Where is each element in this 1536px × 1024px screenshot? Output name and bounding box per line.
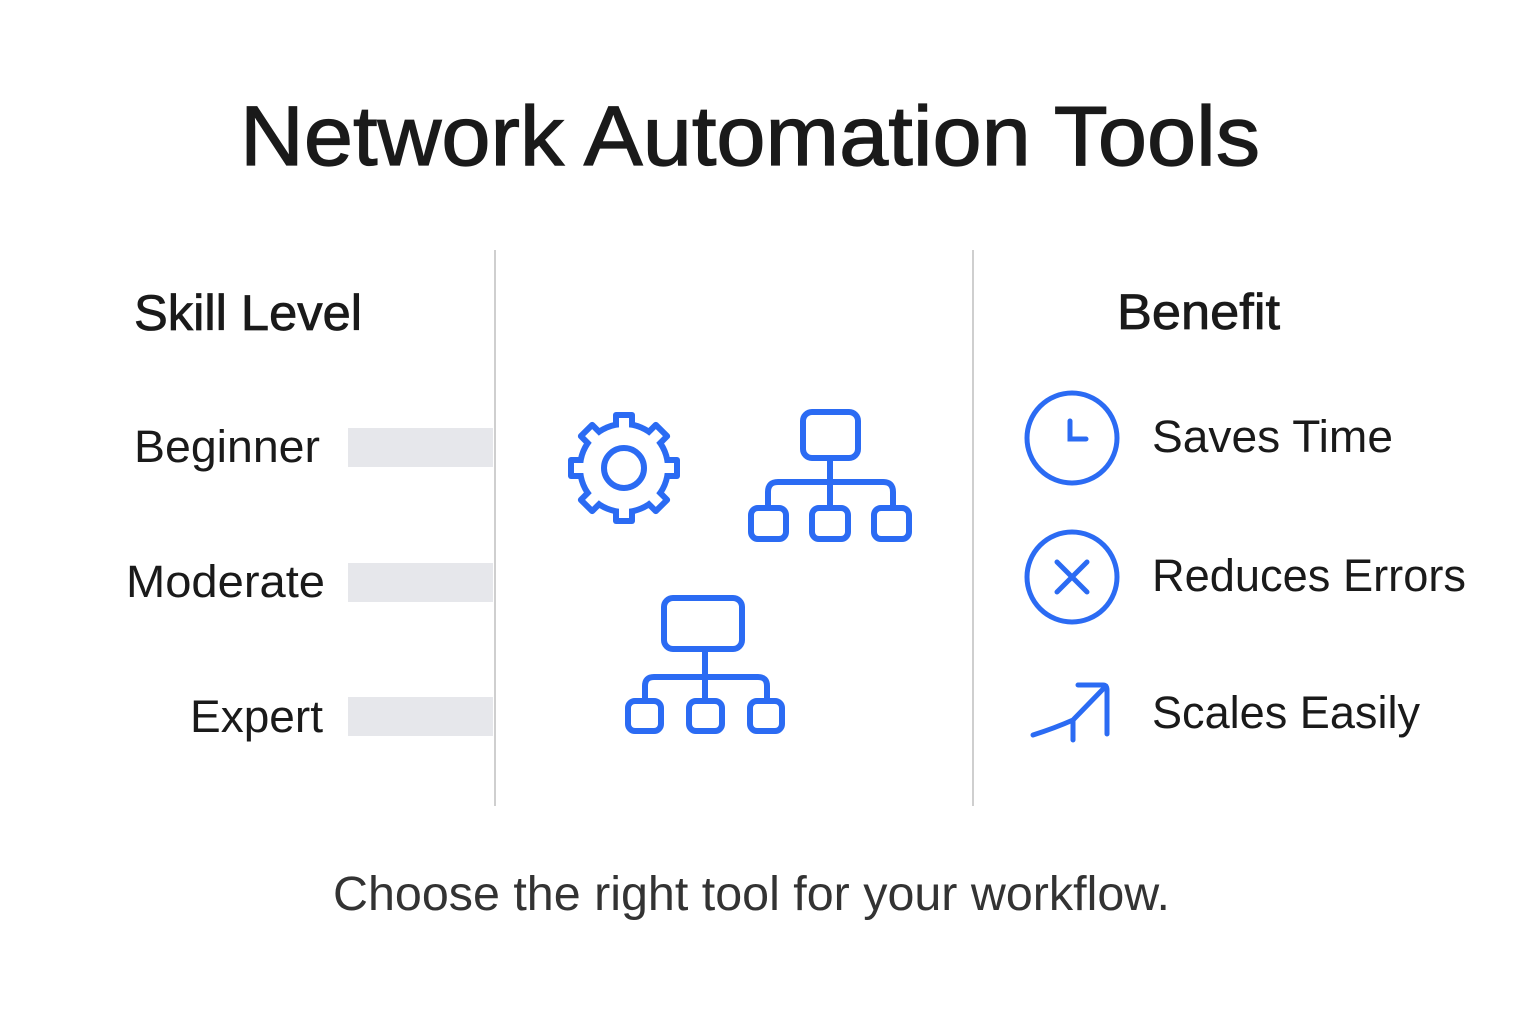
row: beginner: [134, 421, 493, 472]
panel: skill level: [126, 285, 493, 742]
benefit: saves time: [1027, 393, 1393, 483]
row: beginner: Beginner: [134, 421, 320, 472]
benefit: reduces errors: Reduces Errors: [1152, 550, 1466, 601]
heading: skill level: Skill Level: [134, 285, 362, 341]
panel: tools icons: [568, 412, 909, 731]
icon: hierarchy 1: [751, 412, 909, 539]
icon: x circle: [1027, 532, 1117, 622]
row: moderate: [126, 556, 493, 607]
icon: gear: [568, 412, 680, 524]
heading: benefit: Benefit: [1117, 284, 1280, 340]
row: expert: Expert: [190, 691, 324, 742]
icon: hierarchy 2: [628, 598, 782, 731]
row: expert: [190, 691, 493, 742]
panel: benefit: [1027, 284, 1466, 740]
icon: growth arrow: [1033, 685, 1107, 740]
icon: clock: [1027, 393, 1117, 483]
benefit: scales easily: Scales Easily: [1152, 687, 1420, 738]
benefit: reduces errors: [1027, 532, 1466, 622]
footer caption: Choose the right tool for your workflow.: [333, 868, 1170, 921]
benefit: scales easily: [1033, 685, 1420, 740]
row: moderate: Moderate: [126, 556, 325, 607]
benefit: saves time: Saves Time: [1152, 411, 1393, 462]
title: Network Automation Tools: [240, 89, 1260, 183]
